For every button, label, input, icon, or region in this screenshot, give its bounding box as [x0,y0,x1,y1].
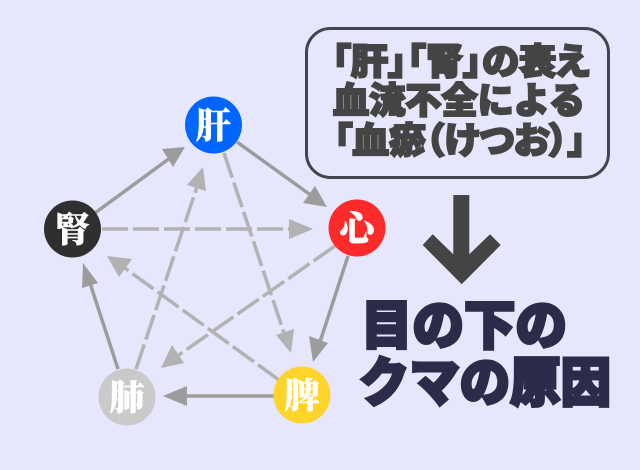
node: kidney [44,200,101,258]
five-element cycle diagram [44,96,386,426]
node: liver [185,96,242,154]
callout box [306,28,608,178]
arrow: spleen to lung [163,386,274,406]
dashed arrow: kidney to heart [102,219,313,239]
node: lung: 肺 [109,379,145,418]
dashed arrow: heart to lung [161,246,335,368]
dashed arrow: spleen to kidney [107,256,279,380]
node: heart: 心 [339,210,380,249]
callout line 3: 「血瘀（けつお）」 [334,120,586,161]
node: liver: 肝 [196,107,231,146]
dashed arrow: liver to spleen [224,153,294,353]
node: spleen [274,366,330,424]
node: kidney: 腎 [55,211,90,250]
headline [359,297,611,413]
arrow: liver to heart [237,142,327,207]
node: lung [98,368,156,426]
icon: down arrow [423,195,501,284]
dashed arrow: lung to liver [136,167,206,369]
arrow: lung to kidney [82,263,118,369]
headline line 2: クマの原因 [359,354,611,413]
headline line 1: 目の下の [361,297,567,356]
arrow: kidney to liver [95,147,185,213]
node: heart [328,200,386,256]
node: spleen: 脾 [284,377,320,416]
arrow: heart to spleen [309,256,348,362]
callout line 1: 「肝」「腎」の衰え [332,41,590,82]
callout line 2: 血流不全による [333,80,585,121]
